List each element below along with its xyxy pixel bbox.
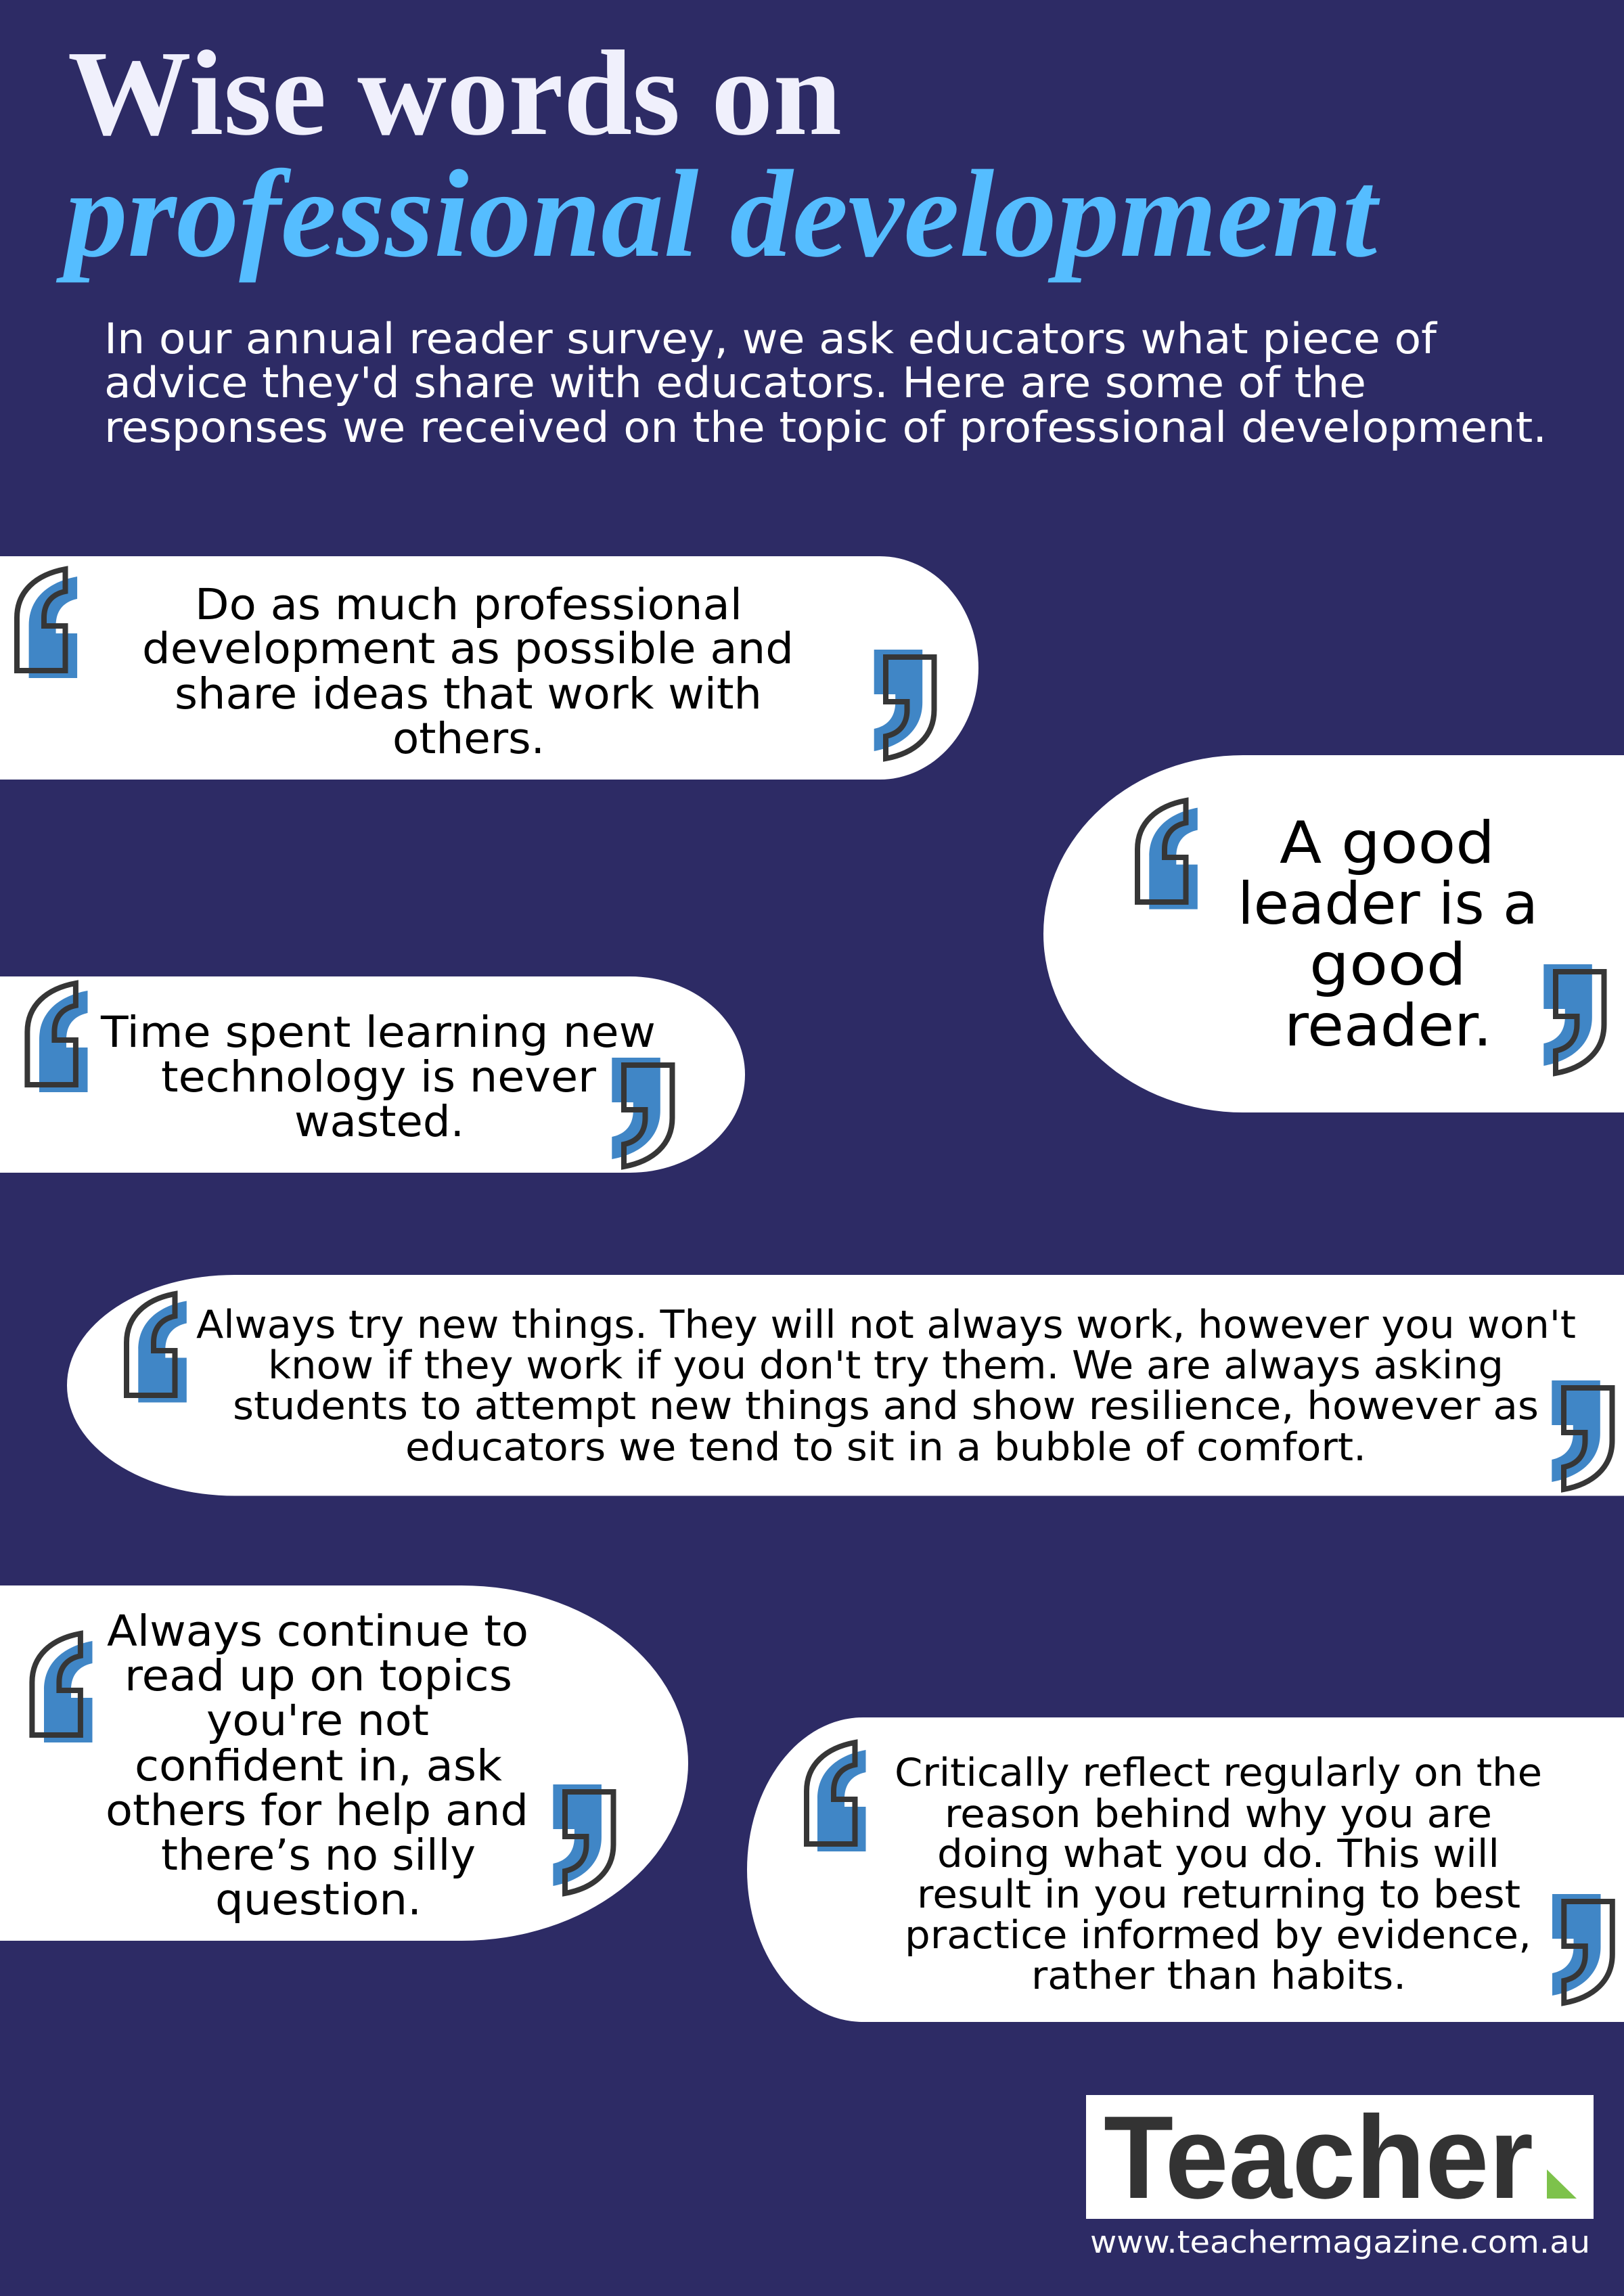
panel: quote 1: others. xyxy=(392,714,545,763)
title: professional development xyxy=(55,145,1380,284)
logo: Teacher: Teacher xyxy=(1104,2091,1533,2223)
panel: quote 3: technology is never xyxy=(161,1052,596,1102)
panel: quote 5: confident in, ask xyxy=(135,1741,503,1791)
website url: www.teachermagazine.com.au xyxy=(1090,2224,1590,2260)
intro text xyxy=(104,314,1547,452)
panel: quote 3: Time spent learning new xyxy=(100,1008,656,1057)
panel: quote 1: development as possible and xyxy=(142,624,794,673)
intro text: advice they'd share with educators. Here are some of the xyxy=(104,358,1366,407)
panel: quote 6: doing what you do. This will xyxy=(937,1832,1499,1876)
panel: quote 5: Always continue to xyxy=(107,1606,528,1656)
panel: quote 3: wasted. xyxy=(294,1097,464,1146)
panel: quote 1: share ideas that work with xyxy=(175,669,762,719)
intro text: In our annual reader survey, we ask educators what piece of xyxy=(104,314,1438,363)
panel: quote 5: you're not xyxy=(206,1696,429,1745)
panel: quote 4: know if they work if you don't try them. We are always asking xyxy=(268,1343,1504,1388)
panel: quote 2: good xyxy=(1309,931,1466,999)
panel: quote 4 xyxy=(67,1275,1624,1495)
title: Wise words on xyxy=(68,26,842,160)
panel: quote 2: reader. xyxy=(1284,992,1492,1060)
panel: quote 2: leader is a xyxy=(1238,870,1538,938)
panel: quote 3 xyxy=(0,976,745,1173)
panel: quote 6: practice informed by evidence, xyxy=(905,1913,1531,1958)
panel: quote 5: others for help and xyxy=(106,1786,528,1835)
panel: quote 2: A good xyxy=(1280,809,1495,877)
panel: quote 4: Always try new things. They will not always work, however you won't xyxy=(196,1303,1576,1347)
panel: quote 4: educators we tend to sit in a bubble of comfort. xyxy=(405,1425,1366,1470)
panel: quote 6: reason behind why you are xyxy=(945,1792,1492,1837)
panel: quote 5: question. xyxy=(215,1875,422,1924)
panel: quote 4: students to attempt new things and show resilience, however as xyxy=(233,1384,1539,1428)
panel: quote 2 xyxy=(1043,755,1624,1112)
panel: quote 5: there’s no silly xyxy=(161,1830,476,1880)
panel: quote 5 xyxy=(0,1585,688,1941)
panel: quote 6: rather than habits. xyxy=(1031,1954,1406,1998)
panel: quote 1: Do as much professional xyxy=(195,580,742,629)
panel: quote 1 xyxy=(0,556,978,780)
title xyxy=(55,26,1380,284)
panel: quote 6: Critically reflect regularly on the xyxy=(895,1751,1542,1795)
intro text: responses we received on the topic of professional development. xyxy=(104,403,1547,452)
panel: quote 6: result in you returning to best xyxy=(917,1872,1520,1917)
panel: quote 5: read up on topics xyxy=(125,1651,512,1701)
panel: quote 6 xyxy=(747,1717,1624,2022)
